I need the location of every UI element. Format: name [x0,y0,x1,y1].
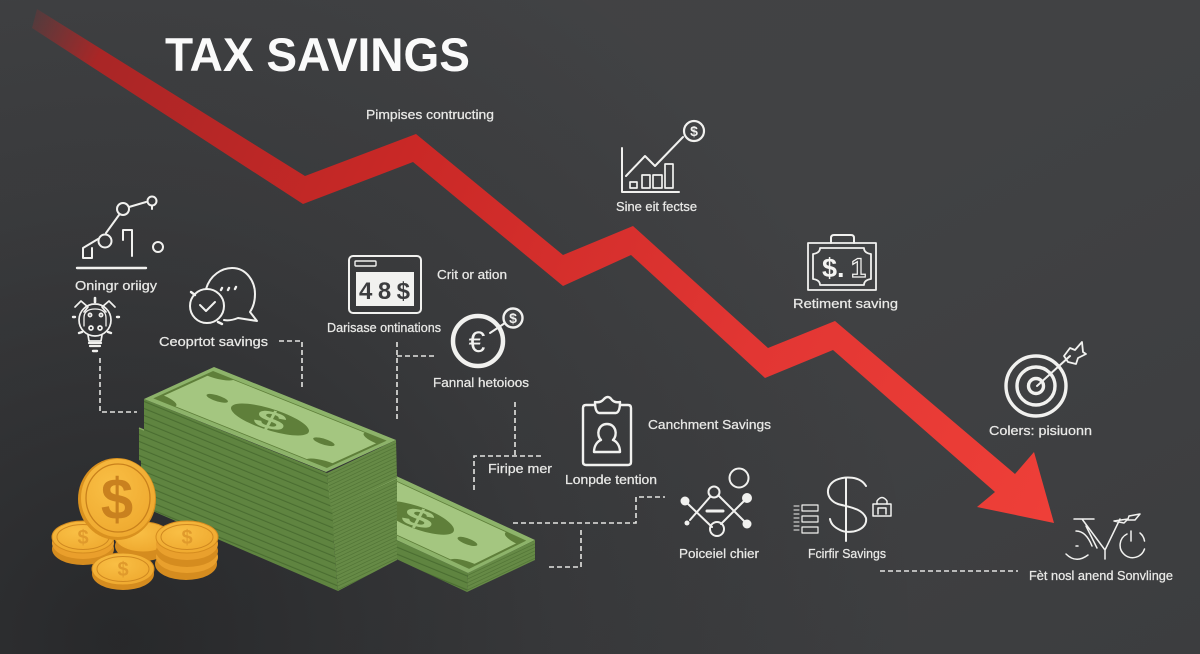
bottom bundle [141,450,397,591]
icon: euro coin with dollar badge: € [469,326,486,359]
label: Fet nosl anend Sonvlinge: Fèt nosl anend Sonvlinge [1029,568,1173,583]
label: Fannal hetoioos: Fannal hetoioos [433,375,530,390]
illustration: gold coins [52,458,218,590]
label: Pimpises contructing: Pimpises contructing [366,107,494,122]
icon: banknote case $.1: 1 [851,253,866,283]
label: Oningr oriigy: Oningr oriigy [75,278,158,293]
front coin [92,553,154,590]
middle bundle [139,428,397,540]
illustration: single banknote stack [328,476,535,592]
left coin pile: $ [77,527,89,549]
icon: bicycle [1066,514,1144,559]
label: Darisase ontinations: Darisase ontinations [327,320,441,335]
label: Ceoprtot savings: Ceoprtot savings [159,334,269,349]
right coin pile: $ [181,527,193,549]
back coin [115,522,171,561]
icon: target with arrow [1006,342,1086,416]
icon: banknote case $.1 [808,235,876,290]
illustration: large banknote stack [138,367,397,591]
label: Lonpde tention: Lonpde tention [565,472,657,487]
icon: clipboard with person [583,397,631,465]
icon: light bulb [73,298,119,351]
icon: dollar sign with list and lock [794,478,891,541]
label: Fcirfir Savings: Fcirfir Savings [808,546,886,561]
left coin pile [52,521,114,565]
label: Crit or ation: Crit or ation [437,267,507,282]
top bill face [144,367,396,472]
icon: banknote case $.1: $. [822,253,845,283]
icon: network nodes [680,468,752,536]
big upright coin: $ [101,467,133,532]
top bundle [144,399,397,510]
icon: euro coin with dollar badge: $ [509,310,517,326]
icon: chart with dollar: $ [690,123,698,139]
big upright coin [78,458,156,540]
label: Sine eit fectse: Sine eit fectse [616,199,697,214]
label: Colers pisiuonn: Colers: pisiuonn [989,423,1092,438]
label: Poiceiel chier: Poiceiel chier [679,546,760,561]
dashed connectors [100,341,1018,571]
icon: chart with dollar [622,121,704,192]
icon: browser window 48$: 48$ [359,278,411,305]
right coin pile [155,521,218,580]
red descending arrow [32,9,1054,523]
icon: line chart with nodes [77,196,163,268]
illustration: large banknote stack: $ [248,404,293,437]
icon: euro coin with dollar badge [453,308,522,366]
label: Firipe mer: Firipe mer [488,461,553,476]
front coin: $ [117,559,129,581]
label: Canchment Savings: Canchment Savings [648,417,772,432]
illustration: single banknote stack: $ [396,502,441,535]
label: Retiment saving: Retiment saving [793,296,898,311]
icon: chat bubble with clock [190,268,257,324]
icon: browser window 48$ [349,256,421,313]
title: TAX SAVINGS [165,28,470,81]
